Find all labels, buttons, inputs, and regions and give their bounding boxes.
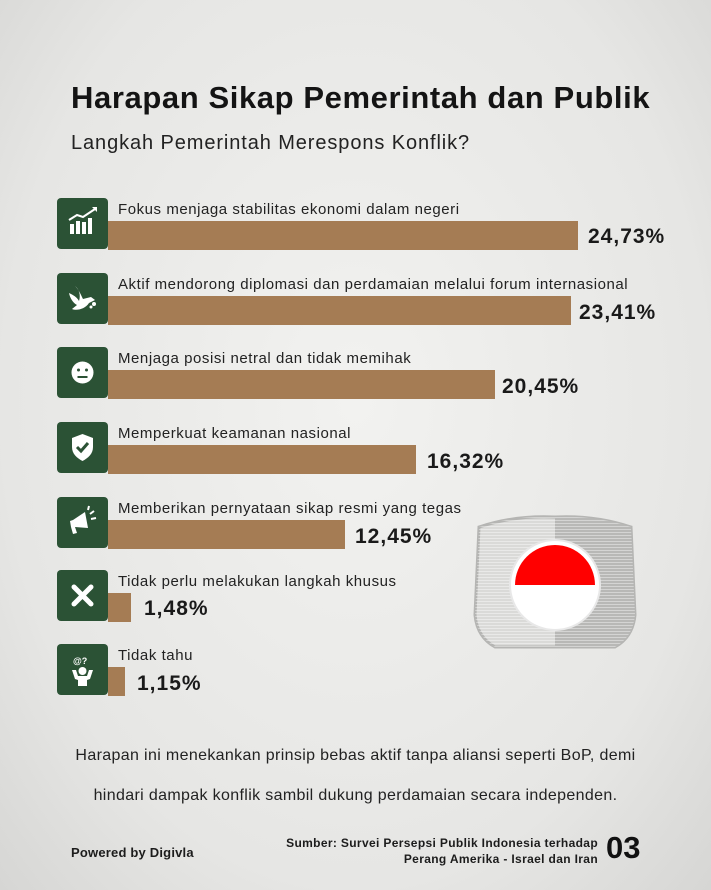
row 4: 16,32% [427, 450, 504, 473]
icon: chart [57, 198, 108, 249]
conclusion text: hindari dampak konflik sambil dukung perdamaian secara independen. [94, 787, 617, 804]
row 2 [57, 273, 656, 325]
icon: neutral face [57, 347, 108, 398]
row 7 [57, 644, 202, 696]
row 6 [57, 570, 397, 622]
footer: powered by: Powered by Digivla [71, 845, 194, 860]
subtitle: Langkah Pemerintah Merespons Konflik? [71, 132, 470, 154]
row 5 [57, 497, 462, 549]
row 3 [57, 347, 579, 399]
icon: shield check [57, 422, 108, 473]
icon: dove [57, 273, 108, 324]
row 4 [57, 422, 504, 474]
row 6: Tidak perlu melakukan langkah khusus [118, 573, 397, 590]
row 6: 1,48% [144, 597, 209, 620]
row 4: Memperkuat keamanan nasional [118, 425, 351, 442]
footer: source [286, 836, 598, 866]
row 7: 1,15% [137, 672, 202, 695]
conclusion text: Harapan ini menekankan prinsip bebas aktif tanpa aliansi seperti BoP, demi [75, 747, 636, 764]
row 5: 12,45% [355, 525, 432, 548]
row 1 [57, 198, 665, 250]
illustration: shield with Indonesian flag [474, 515, 636, 648]
title: Harapan Sikap Pemerintah dan Publik [71, 80, 650, 115]
page number: 03 [606, 830, 640, 865]
footer: source: Perang Amerika - Israel dan Iran [404, 852, 598, 866]
row 2: Aktif mendorong diplomasi dan perdamaian melalui forum internasional [118, 276, 628, 293]
icon: confused person: @? [73, 656, 87, 666]
row 3: Menjaga posisi netral dan tidak memihak [118, 350, 411, 367]
row 3: 20,45% [502, 375, 579, 398]
icon: megaphone [57, 497, 108, 548]
row 5: Memberikan pernyataan sikap resmi yang tegas [118, 500, 462, 517]
row 1: 24,73% [588, 225, 665, 248]
icon: confused person [57, 644, 108, 695]
row 7: Tidak tahu [118, 647, 193, 664]
conclusion text [75, 747, 636, 804]
footer: source: Sumber: Survei Persepsi Publik Indonesia terhadap [286, 836, 598, 850]
row 1: Fokus menjaga stabilitas ekonomi dalam negeri [118, 201, 460, 218]
row 2: 23,41% [579, 301, 656, 324]
icon: cross [57, 570, 108, 621]
